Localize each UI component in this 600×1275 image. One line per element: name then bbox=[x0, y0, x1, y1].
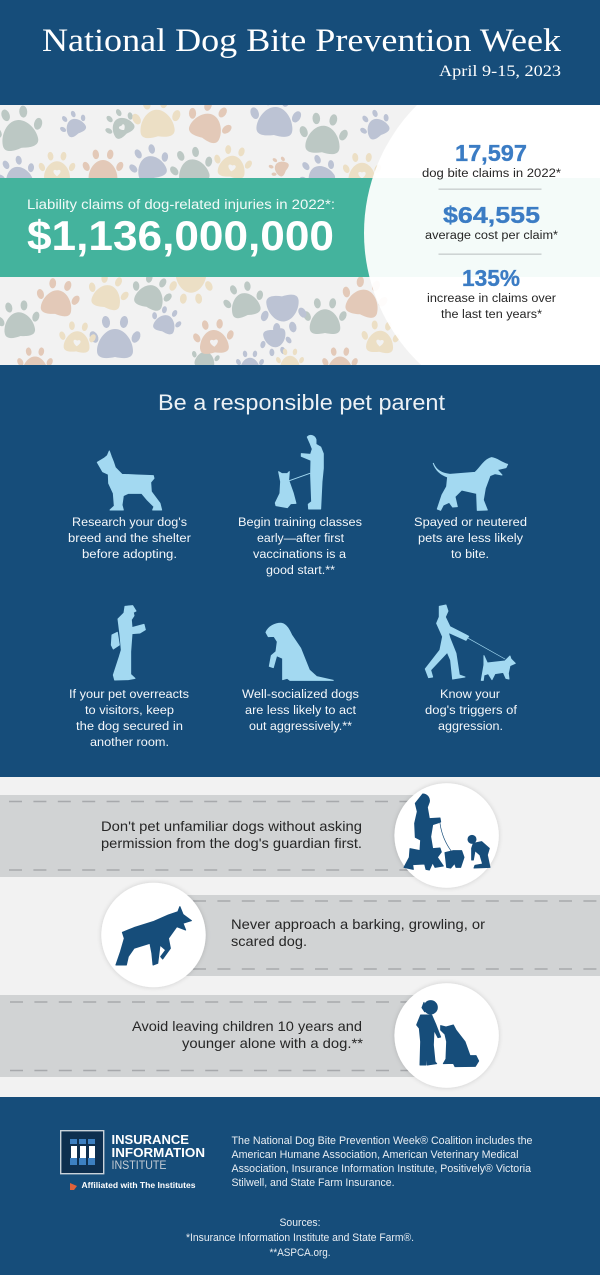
coalition text: Association, Insurance Information Institute, Positively® Victoria bbox=[232, 1163, 532, 1175]
icon: woman with dogs and child bbox=[394, 783, 499, 888]
band: unfamiliar dogs: permission from the dog's guardian first. bbox=[101, 835, 362, 851]
icon: person walking dog bbox=[425, 605, 515, 680]
tip: secure the dog bbox=[69, 606, 189, 749]
tip: secure the dog: the dog secured in bbox=[76, 719, 183, 733]
icon: sitting dog bbox=[266, 623, 333, 680]
affiliation mark bbox=[70, 1183, 77, 1190]
tip: socialized dogs: are less likely to act bbox=[245, 703, 357, 717]
tip: socialized dogs: Well-socialized dogs bbox=[242, 687, 359, 701]
panel: paw print statistics band bbox=[0, 105, 600, 365]
band: barking dog: Never approach a barking, growling, or bbox=[231, 916, 485, 932]
tip: socialized dogs: out aggressively.** bbox=[249, 719, 352, 733]
sources: *Insurance Information Institute and State Farm®. bbox=[186, 1232, 414, 1244]
title header bbox=[42, 23, 562, 80]
icon: schnauzer bbox=[97, 451, 162, 510]
icon: child with dog bbox=[394, 983, 499, 1088]
tip: know triggers: aggression. bbox=[438, 719, 503, 733]
light background bbox=[0, 777, 600, 1097]
tip: research breed bbox=[68, 451, 191, 561]
sources bbox=[186, 1217, 414, 1259]
stat: average cost: $64,555 bbox=[443, 202, 540, 228]
logo: Insurance Information Institute: INSTITUTE bbox=[112, 1160, 167, 1172]
tip: know triggers: Know your bbox=[440, 687, 500, 701]
tip: know triggers bbox=[425, 605, 518, 733]
tip: spayed or neutered: Spayed or neutered bbox=[414, 515, 527, 529]
white circle backdrop bbox=[364, 105, 600, 365]
total claims figure: $1,136,000,000 bbox=[27, 212, 334, 259]
tip: secure the dog: another room. bbox=[90, 735, 169, 749]
icon: visitor with bag bbox=[111, 606, 145, 680]
stat: increase bbox=[427, 265, 556, 321]
stat: claims: 17,597 bbox=[455, 140, 527, 166]
statistics column bbox=[422, 140, 562, 321]
stat: increase: increase in claims over bbox=[427, 293, 556, 305]
band: children alone bbox=[0, 995, 430, 1077]
stat: average cost bbox=[425, 202, 559, 242]
coalition text: The National Dog Bite Prevention Week® Coalition includes the bbox=[232, 1135, 532, 1147]
band: unfamiliar dogs: Don't pet unfamiliar dogs without asking bbox=[101, 818, 362, 834]
tip: spayed or neutered: to bite. bbox=[451, 547, 489, 561]
date: April 9-15, 2023 bbox=[439, 63, 561, 80]
icon: aggressive dog bbox=[101, 883, 206, 987]
title: National Dog Bite Prevention Week bbox=[42, 23, 562, 59]
tip: research breed: before adopting. bbox=[82, 547, 177, 561]
sources: **ASPCA.org. bbox=[270, 1247, 330, 1259]
coalition text bbox=[232, 1135, 532, 1189]
coalition text: American Humane Association, American Veterinary Medical bbox=[232, 1149, 518, 1161]
logo: Insurance Information Institute: INSURANCE bbox=[112, 1133, 189, 1147]
coalition text: Stilwell, and State Farm Insurance. bbox=[232, 1177, 394, 1189]
tip: research breed: breed and the shelter bbox=[68, 531, 191, 545]
tip: secure the dog: If your pet overreacts bbox=[69, 687, 189, 701]
tip: training classes: good start.** bbox=[266, 563, 335, 577]
tip: training classes: early—after first bbox=[257, 531, 345, 545]
band: children alone: younger alone with a dog.** bbox=[182, 1035, 364, 1051]
tip: know triggers: dog's triggers of bbox=[425, 703, 518, 717]
logo: Insurance Information Institute: Affiliated with The Institutes bbox=[82, 1180, 196, 1190]
tip: socialized dogs bbox=[242, 623, 359, 733]
logo: Insurance Information Institute: INFORMATION bbox=[112, 1146, 205, 1160]
tip: secure the dog: to visitors, keep bbox=[85, 703, 174, 717]
band: barking dog: scared dog. bbox=[231, 933, 307, 949]
tip: research breed: Research your dog's bbox=[72, 515, 187, 529]
logo mark bbox=[61, 1131, 104, 1174]
tip: spayed or neutered bbox=[414, 458, 527, 561]
banner caption: Liability claims of dog-related injuries in 2022*: bbox=[27, 197, 335, 212]
band: children alone: Avoid leaving children 10 years and bbox=[132, 1018, 362, 1034]
tip: training classes: Begin training classes bbox=[238, 515, 362, 529]
panel: safety tips bbox=[0, 777, 600, 1097]
stat: average cost: average cost per claim* bbox=[425, 230, 559, 242]
stat: claims bbox=[422, 140, 562, 180]
sources: Sources: bbox=[280, 1217, 320, 1229]
icon: standing dog bbox=[433, 458, 508, 510]
logo: Insurance Information Institute bbox=[61, 1131, 205, 1190]
stat: claims: dog bite claims in 2022* bbox=[422, 168, 562, 180]
banner text bbox=[27, 197, 335, 259]
paw background bbox=[0, 105, 600, 365]
band: unfamiliar dogs bbox=[0, 795, 430, 877]
stat: increase: the last ten years* bbox=[441, 309, 543, 321]
paw pattern bbox=[0, 91, 402, 377]
tip: training classes bbox=[238, 435, 362, 577]
tip: spayed or neutered: pets are less likely bbox=[418, 531, 524, 545]
icon: trainer with sitting dog bbox=[275, 435, 323, 509]
band: barking dog bbox=[170, 895, 600, 976]
stat: increase: 135% bbox=[462, 265, 520, 291]
tip: training classes: vaccinations is a bbox=[253, 547, 346, 561]
heading: responsible pet parent: Be a responsible pet parent bbox=[158, 390, 445, 415]
teal banner bbox=[0, 178, 600, 277]
footer bbox=[61, 1131, 532, 1259]
